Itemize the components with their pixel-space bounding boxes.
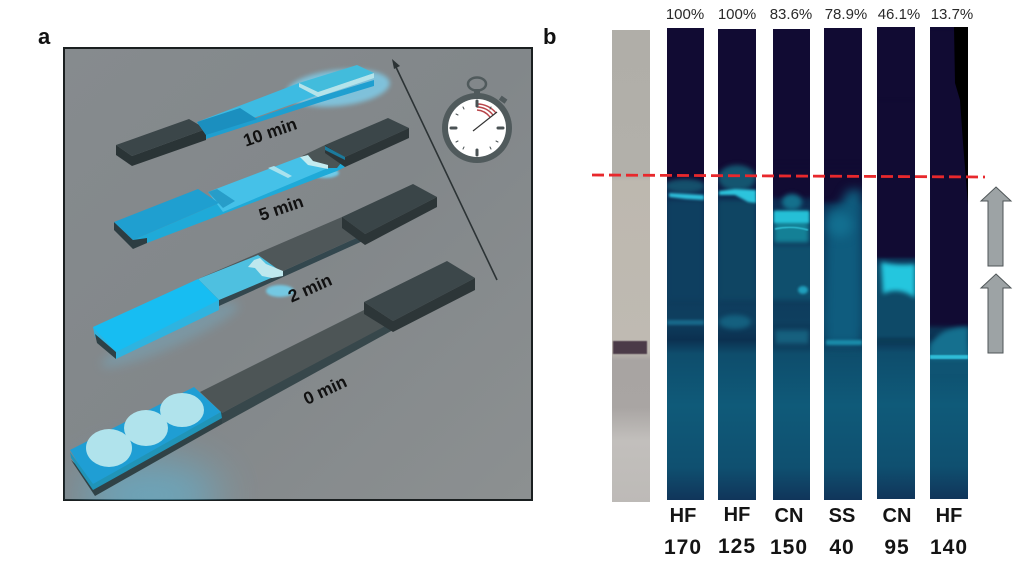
strip: 2 min bbox=[93, 184, 437, 359]
membrane labels bbox=[664, 504, 968, 559]
percentages row: 83.6% bbox=[770, 6, 812, 23]
fluorescent strip: HF 125 bbox=[718, 29, 756, 500]
membrane labels: HF bbox=[936, 505, 962, 527]
fluorescent strip: HF 140 bbox=[930, 27, 968, 499]
percentages row: 46.1% bbox=[878, 6, 920, 23]
icon: stopwatch bbox=[442, 78, 512, 163]
membrane labels: 140 bbox=[930, 536, 968, 559]
test line bbox=[613, 341, 647, 354]
percentages row: 100% bbox=[666, 6, 704, 23]
membrane labels: SS bbox=[829, 505, 855, 527]
panel a: lateral flow strips over time bbox=[64, 48, 532, 530]
membrane labels: 170 bbox=[664, 536, 702, 559]
strip: 0 min bbox=[70, 261, 475, 496]
label: 2 min: 2 min bbox=[285, 270, 335, 306]
strip: 5 min bbox=[114, 118, 409, 249]
fluorescent strip: CN 95 bbox=[877, 27, 915, 499]
upper flow arrow bbox=[981, 187, 1011, 266]
membrane labels: CN bbox=[883, 505, 911, 527]
membrane labels: HF bbox=[724, 504, 750, 526]
percentages row: 100% bbox=[718, 6, 756, 23]
label: 10 min: 10 min bbox=[241, 114, 299, 150]
sample drops bbox=[86, 393, 204, 467]
label: 0 min: 0 min bbox=[300, 371, 350, 409]
membrane labels: 95 bbox=[884, 536, 910, 559]
label: 5 min: 5 min bbox=[256, 191, 306, 225]
membrane labels: 150 bbox=[770, 536, 808, 559]
glow: 10 min wick bbox=[284, 65, 392, 111]
reference strip (visible light) bbox=[612, 30, 650, 502]
scanner shadow edge bbox=[954, 27, 968, 205]
membrane labels: CN bbox=[775, 505, 803, 527]
percentages row: 13.7% bbox=[931, 6, 973, 23]
percentages row: 78.9% bbox=[825, 6, 867, 23]
strip: 10 min bbox=[116, 65, 374, 166]
glow: base of 0 min strip bbox=[80, 460, 220, 530]
glow: 2 min pad bbox=[103, 302, 237, 369]
fluorescent strip: HF 170 bbox=[665, 28, 705, 500]
membrane labels: 40 bbox=[829, 536, 855, 559]
membrane labels: 125 bbox=[718, 535, 756, 558]
fluorescent strip: SS 40 bbox=[824, 28, 862, 500]
percentages row bbox=[666, 6, 973, 23]
panel label b: b bbox=[543, 24, 556, 49]
time arrow bbox=[392, 59, 497, 280]
lower flow arrow bbox=[981, 274, 1011, 353]
threshold line bbox=[592, 175, 985, 177]
panel label a: a bbox=[38, 24, 51, 49]
membrane labels: HF bbox=[670, 505, 696, 527]
fluorescent strip: CN 150 bbox=[773, 29, 810, 500]
